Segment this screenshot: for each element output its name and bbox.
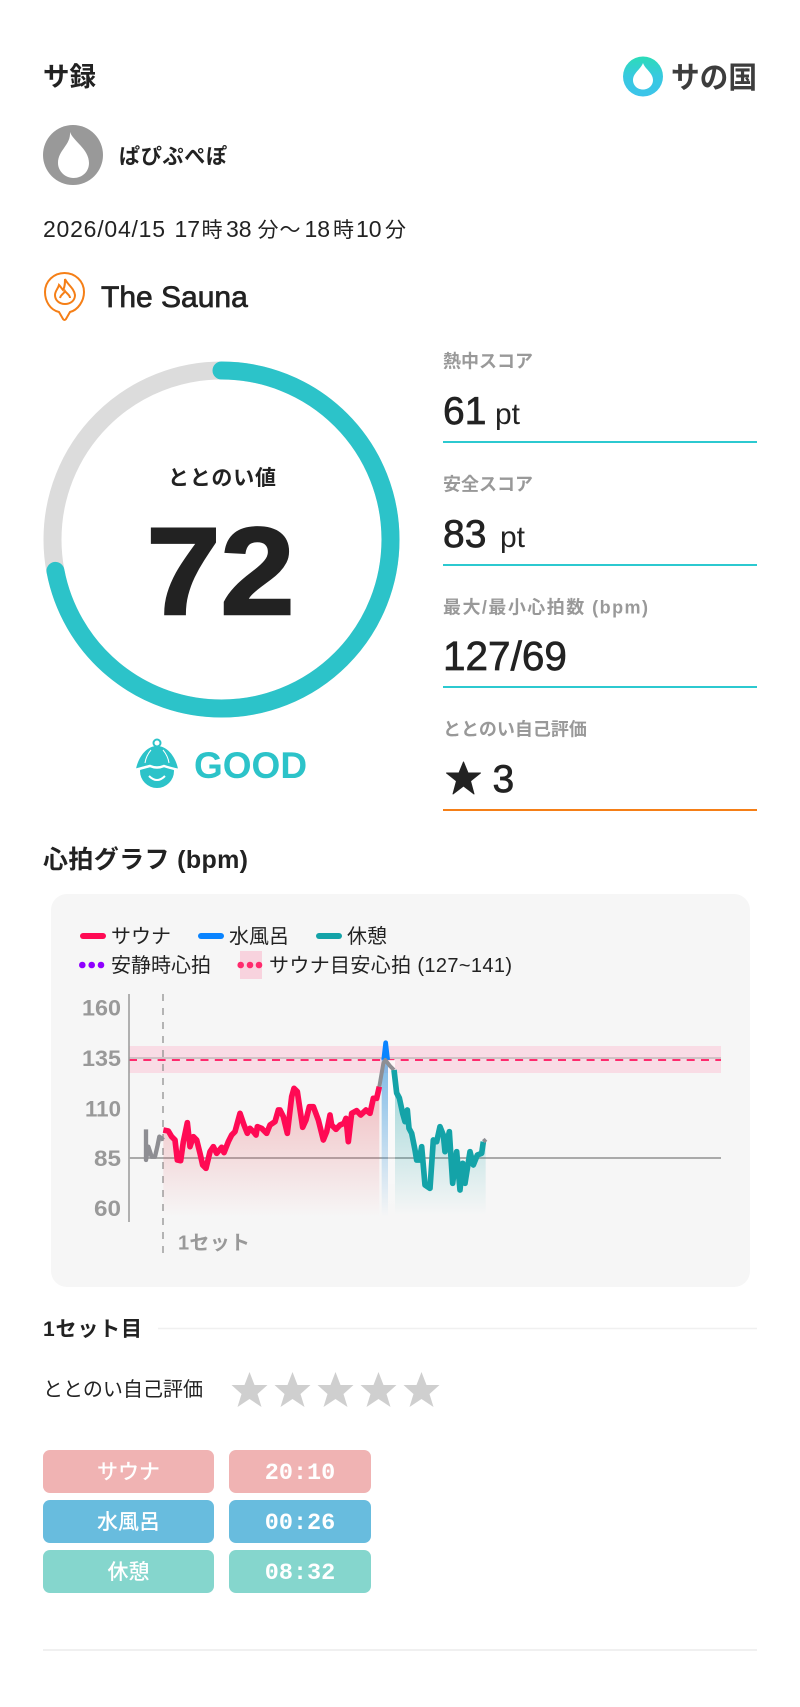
date and time: 17 [174,216,200,242]
title: サ録: サ録 [43,62,96,92]
stat: 最大/最小心拍数: 127/69 [443,633,567,679]
time row: 休憩: 08:32 [265,1560,335,1587]
panel: heart-rate chart [51,894,750,1287]
gauge: ととのい値: ととのい値 [168,467,276,490]
logo: サの国 [623,56,757,96]
date and time: 2026/04/15 [43,216,165,242]
legend: 水風呂 [229,925,289,948]
time row: 水風呂: 水風呂 [97,1511,160,1534]
stat: 最大/最小心拍数 [443,598,757,688]
place name: The Sauna [101,281,248,314]
stat: 安全スコア: pt [500,521,526,554]
stat: 安全スコア [443,474,757,566]
stat: 安全スコア: 83 [443,513,486,556]
y axis: 135 [82,1046,121,1071]
rating: GOOD: GOOD [194,745,307,786]
logo: サの国: サの国 [671,62,757,95]
time row: サウナ: 20:10 [265,1460,335,1487]
heart-rate line chart [146,1043,486,1217]
date and time: 時 [333,219,354,242]
y axis [82,994,721,1260]
y axis: 85 [94,1146,121,1171]
gauge: ととのい値 [52,370,390,708]
date and time: 分 [385,219,406,242]
target heart-rate band [129,1046,721,1073]
legend: 安静時心拍 [111,954,211,977]
stat: 熱中スコア: 熱中スコア [443,352,533,372]
time row: 水風呂: 00:26 [265,1510,335,1537]
avatar icon [43,125,103,185]
date and time: 時 [202,219,222,242]
stat: 熱中スコア: pt [495,398,521,431]
time row: サウナ [43,1450,371,1493]
y axis: 160 [82,996,121,1020]
date and time: 10 [356,216,382,242]
stat: ととのい自己評価 [443,720,757,811]
stat: 熱中スコア: 61 [443,390,486,433]
star rating: 0 of 5 [232,1372,440,1407]
legend: 休憩 [347,925,387,948]
stat: 熱中スコア [443,352,757,443]
date and time: 分 [258,219,278,242]
stat: ととのい自己評価: 3 [492,758,514,801]
icon: flame pin [45,273,84,320]
icon: bell hat [135,740,179,788]
gauge: ととのい値: 72 [146,503,294,641]
legend: サウナ [111,926,171,948]
y axis: 110 [85,1096,121,1122]
stat: ととのい自己評価: ととのい自己評価 [443,720,587,740]
time row: 休憩: 休憩 [108,1561,150,1584]
time row: 水風呂 [43,1500,371,1543]
date and time: 38 [226,216,252,242]
date and time: 18 [304,216,330,242]
user name: ぱぴぷぺぽ [119,144,227,168]
stat: 最大/最小心拍数: 最大/最小心拍数 (bpm) [443,598,648,618]
heading: 心拍グラフ: 心拍グラフ (bpm) [43,845,248,874]
stat: 安全スコア: 安全スコア [443,474,533,494]
label: ととのい自己評価: ととのい自己評価 [43,1378,203,1401]
legend [79,925,512,979]
heading: 1セット目: 1セット目 [43,1318,142,1341]
time row: サウナ: サウナ [97,1461,160,1484]
time row: 休憩 [43,1550,371,1593]
y axis: 1セット [178,1232,250,1254]
legend: サウナ目安心拍 (127~141) [269,954,512,977]
date and time: 〜 [280,219,300,242]
y axis: 60 [94,1196,121,1221]
